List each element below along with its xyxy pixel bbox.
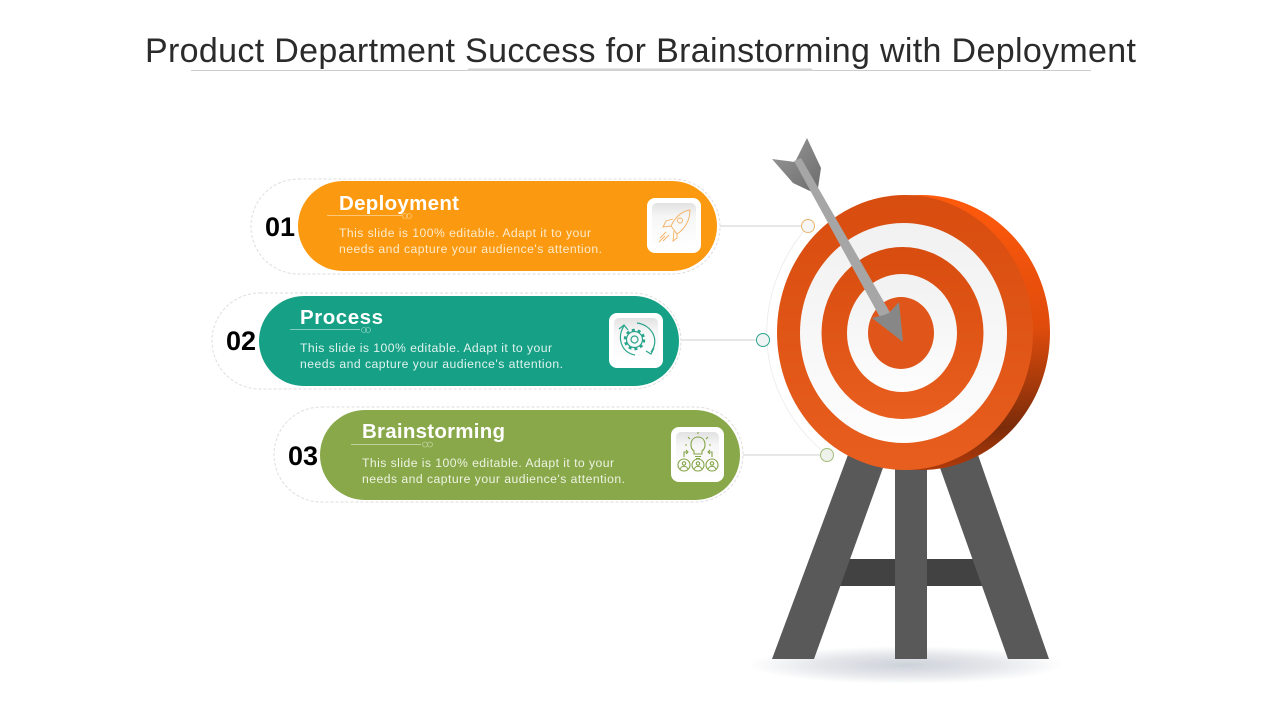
connector: brainstorming: [743, 448, 834, 462]
pill: [259, 296, 679, 386]
fletching: [772, 138, 821, 192]
center leg: [895, 462, 927, 659]
dashed outline: [274, 407, 743, 502]
crossbar: [838, 559, 984, 586]
body text: This slide is 100% editable. Adapt it to your: [339, 226, 591, 240]
panel: process: [212, 293, 681, 389]
title underline: [191, 68, 1091, 71]
heading: Brainstorming: [362, 420, 505, 443]
heading rule: [290, 328, 370, 332]
arrow: [772, 138, 903, 342]
target stand: [772, 452, 1049, 659]
outer ring: [777, 195, 1033, 470]
board side: [792, 195, 1050, 470]
heading: Deployment: [339, 192, 459, 215]
heading rule: [351, 442, 432, 447]
number 01: 01: [265, 212, 295, 242]
middle ring: [822, 247, 984, 419]
floor shadow: [748, 646, 1064, 684]
panel: brainstorming: [274, 407, 743, 502]
connector: deployment: [720, 220, 814, 232]
shaft: [794, 158, 892, 321]
bullseye: [868, 297, 934, 369]
left leg: [772, 452, 884, 659]
connector: process: [681, 334, 770, 346]
white ring: [800, 223, 1007, 443]
number 02: 02: [226, 326, 256, 356]
pill: [320, 410, 740, 500]
pill: [298, 181, 717, 271]
target board: [777, 195, 1050, 470]
title: Product Department Success for Brainstorming with Deployment: [145, 32, 1137, 70]
body text: needs and capture your audience's attention.: [362, 472, 625, 486]
heading: Process: [300, 306, 383, 329]
dashed outline: [251, 179, 720, 274]
inner white ring: [847, 274, 957, 392]
decorative arc linking callouts: [767, 226, 827, 455]
head: [872, 302, 903, 342]
body text: This slide is 100% editable. Adapt it to your: [362, 456, 614, 470]
body text: This slide is 100% editable. Adapt it to your: [300, 341, 552, 355]
icon: lightbulb and team: [671, 427, 724, 482]
icon: rocket: [647, 198, 701, 253]
body text: needs and capture your audience's attention.: [339, 242, 602, 256]
panel: deployment: [251, 179, 720, 274]
dashed outline: [212, 293, 681, 389]
body text: needs and capture your audience's attention.: [300, 357, 563, 371]
right leg: [939, 452, 1049, 659]
heading rule: [327, 214, 412, 218]
icon: gear with cycle arrows: [609, 313, 663, 368]
number 03: 03: [288, 441, 318, 471]
